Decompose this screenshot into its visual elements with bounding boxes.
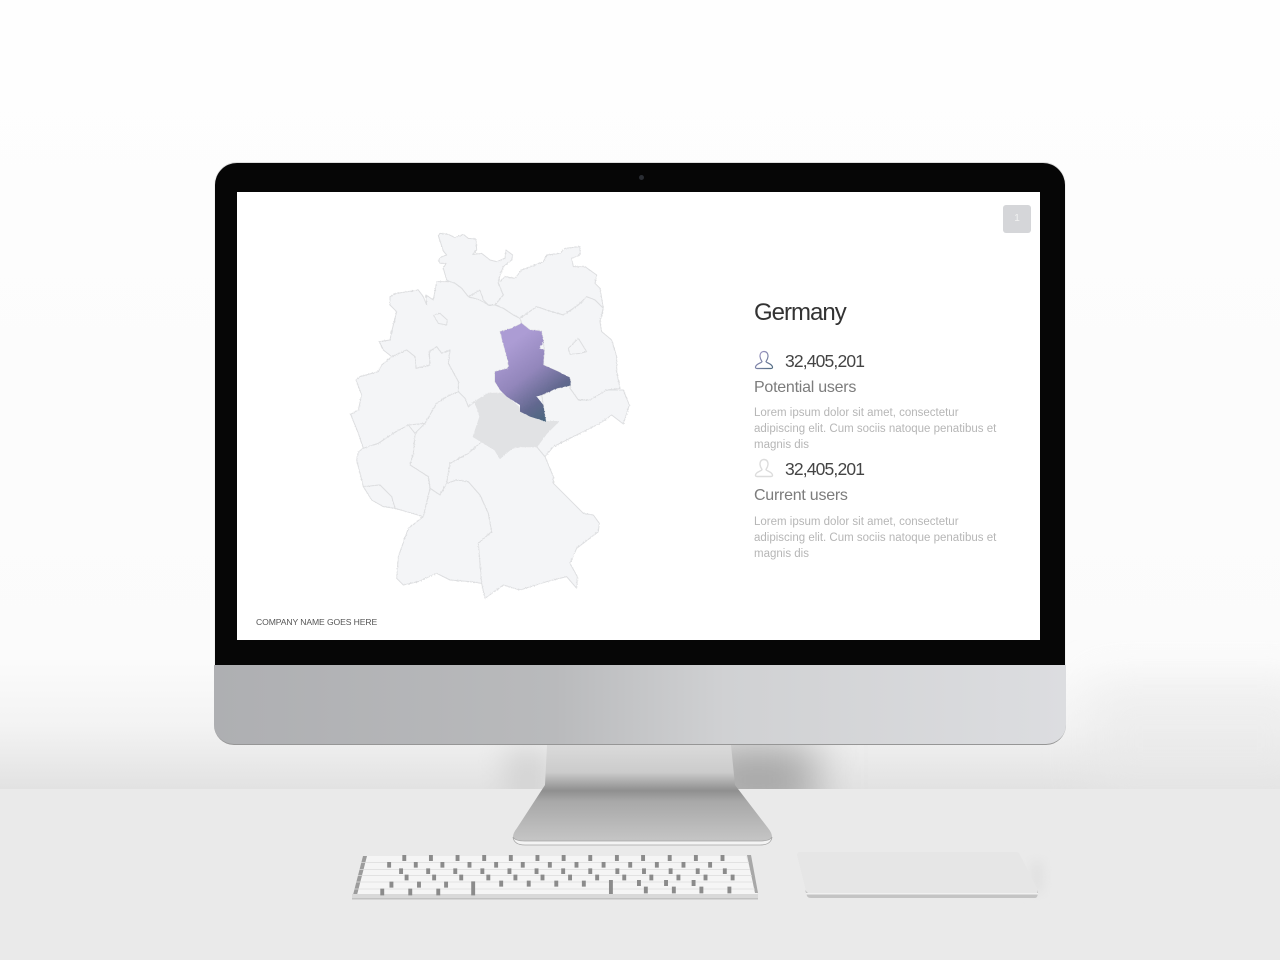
- label: potential users: Potential users: [754, 379, 856, 396]
- page number badge: 1: [1014, 213, 1020, 224]
- region: Rhineland-Palatinate: [357, 425, 430, 517]
- paragraph: potential users: adipiscing elit. Cum sociis natoque penatibus et: [754, 423, 996, 435]
- monitor stand: [512, 745, 772, 846]
- monitor: [214, 162, 1066, 745]
- region: Thuringia: [473, 393, 558, 458]
- page number badge: [1003, 205, 1031, 233]
- region: Saxony-Anhalt highlighted: [495, 323, 571, 422]
- paragraph: current users: adipiscing elit. Cum sociis natoque penatibus et: [754, 532, 996, 544]
- paragraph: potential users: magnis dis: [754, 439, 809, 451]
- region: Bavaria: [447, 442, 599, 598]
- paragraph: current users: magnis dis: [754, 548, 809, 560]
- monitor chin: [214, 665, 1066, 745]
- region: Saxony: [537, 386, 629, 457]
- webcam: [639, 175, 644, 180]
- trackpad: [805, 890, 1038, 898]
- paragraph: current users: [754, 516, 996, 560]
- region: Saarland: [363, 485, 395, 508]
- map of Germany: [350, 232, 630, 600]
- keyboard: [352, 855, 758, 900]
- paragraph: current users: Lorem ipsum dolor sit amet, consectetur: [754, 516, 959, 528]
- stat: potential users value: 32,405,201: [785, 351, 864, 371]
- title: Germany: [754, 299, 846, 326]
- footer company name: COMPANY NAME GOES HERE: [256, 617, 377, 627]
- region: Schleswig-Holstein: [438, 233, 513, 305]
- region: Baden-Wuerttemberg: [397, 480, 492, 585]
- paragraph: potential users: Lorem ipsum dolor sit amet, consectetur: [754, 407, 959, 419]
- region: Brandenburg: [520, 297, 620, 400]
- monitor black bezel: [215, 163, 1065, 665]
- region: Hesse: [410, 392, 482, 495]
- scene background: wall and desk: [0, 697, 1280, 960]
- region: Bremen: [433, 313, 447, 325]
- icon: potential user: [754, 350, 774, 370]
- label: current users: Current users: [754, 487, 848, 504]
- icon: current user: [754, 458, 774, 478]
- stat: current users value: 32,405,201: [785, 459, 864, 479]
- paragraph: potential users: [754, 407, 996, 451]
- slide screen: [237, 192, 1040, 640]
- region: Berlin: [568, 338, 587, 354]
- map underlay filling gaps: [373, 280, 607, 520]
- region: Mecklenburg-Vorpommern: [495, 247, 603, 318]
- region: North Rhine-Westphalia: [351, 347, 458, 448]
- region: Lower Saxony: [379, 282, 522, 407]
